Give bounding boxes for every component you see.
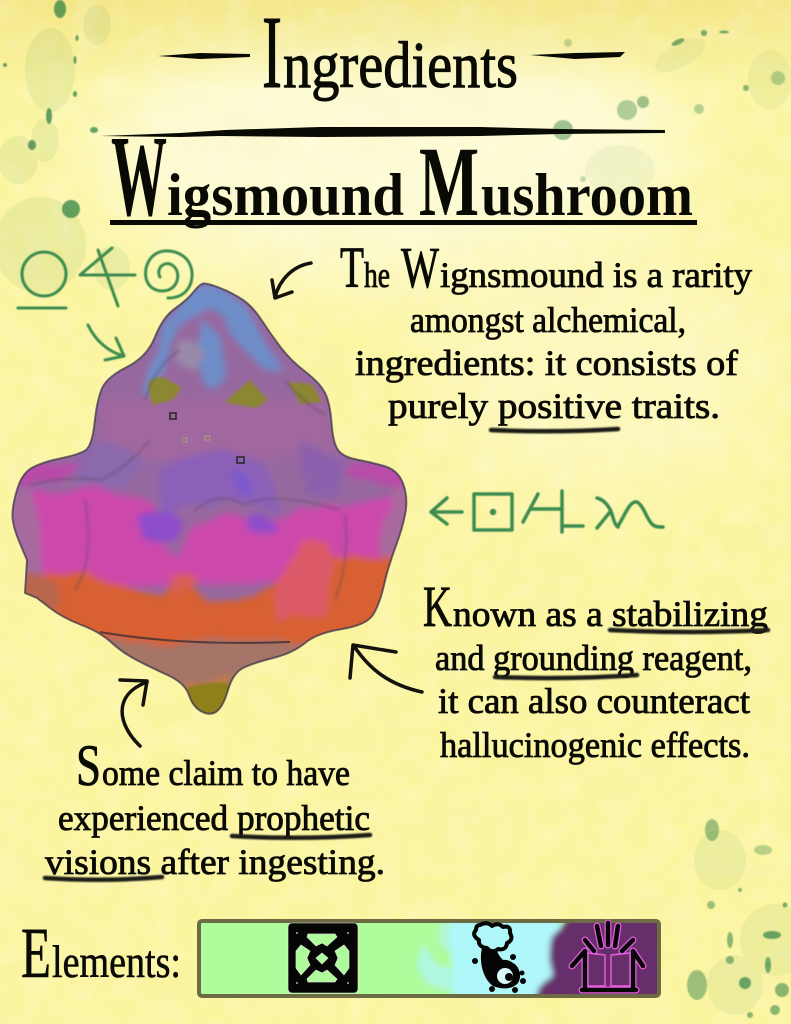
green arrow to mushroom: [88, 325, 124, 360]
mushroom colour: olive patches: [148, 377, 322, 408]
label: Elements: [21, 913, 181, 993]
title: Ingredients: [158, 0, 625, 110]
text block: stabilizing reagent: hallucinogenic effects.: [440, 725, 750, 765]
mushroom colour: underside: [105, 634, 308, 688]
mushroom colour: dark folds: [30, 350, 346, 600]
text block: rarity description: amongst alchemical,: [410, 300, 686, 340]
text block: prophetic visions: experienced prophetic: [58, 798, 370, 838]
brush divider: [100, 127, 665, 137]
green glyphs: right row: [431, 491, 663, 532]
text block: rarity description: [340, 235, 752, 431]
text block: rarity description: purely positive traits.: [388, 386, 720, 426]
heading: Wigsmound Mushroom: [110, 113, 697, 241]
heading: Wigsmound Mushroom: W: [111, 113, 167, 241]
bar colour: cyan: [446, 923, 566, 994]
heading: Wigsmound Mushroom: igsmound: [167, 162, 404, 228]
title: Ingredients: ngredients: [283, 29, 518, 102]
green glyphs: top left: [18, 248, 192, 308]
text block: stabilizing reagent: it can also counteract: [438, 681, 750, 721]
icon: eye creature: [472, 923, 526, 993]
mushroom colour: brim: [25, 488, 395, 590]
elements bar: [197, 919, 661, 998]
heading: Wigsmound Mushroom: M: [419, 126, 479, 237]
text block: prophetic visions: [45, 733, 385, 882]
text block: stabilizing reagent: [423, 574, 768, 765]
text block: rarity description: he: [364, 255, 390, 295]
mushroom specks: [170, 413, 244, 463]
mushroom colour: mid body: [100, 400, 330, 460]
mushroom colour: orange band: [20, 552, 400, 650]
watercolor splatter: bottom right: [687, 819, 791, 1018]
text block: prophetic visions: S: [76, 733, 101, 798]
watercolor splatter: top left: [0, 0, 130, 293]
text block: prophetic visions: ome claim to have: [102, 753, 350, 793]
label: Elements: lements:: [52, 936, 181, 987]
text block: rarity description: ignsmound is a rarity: [440, 255, 752, 295]
text block: stabilizing reagent: and grounding reagent,: [435, 638, 752, 678]
text block: rarity description: T: [340, 235, 364, 300]
text block: rarity description: ingredients: it consists of: [355, 343, 738, 383]
text block: stabilizing reagent: nown as a stabilizing: [453, 594, 768, 634]
arrow: bottom black: [120, 680, 147, 746]
text block: stabilizing reagent: K: [423, 574, 452, 639]
text block: rarity description: W: [401, 235, 439, 300]
icon: open book with rays: [572, 923, 643, 990]
mushroom colour: blue streaks on cap: [140, 286, 285, 395]
bar colour: purple: [533, 923, 657, 994]
text block: prophetic visions: visions after ingesting.: [45, 842, 385, 882]
label: Elements: E: [21, 913, 51, 993]
icon: crossed diamond tile: [288, 923, 358, 993]
arrow: top black: [272, 263, 311, 298]
mushroom illustration: [11, 282, 408, 715]
mushroom outline: [12, 283, 406, 714]
arrow: right black: [350, 645, 422, 692]
heading: Wigsmound Mushroom: ushroom: [481, 162, 693, 228]
watercolor splatter: top right: [553, 30, 791, 195]
mushroom colour: tip: [186, 681, 230, 714]
